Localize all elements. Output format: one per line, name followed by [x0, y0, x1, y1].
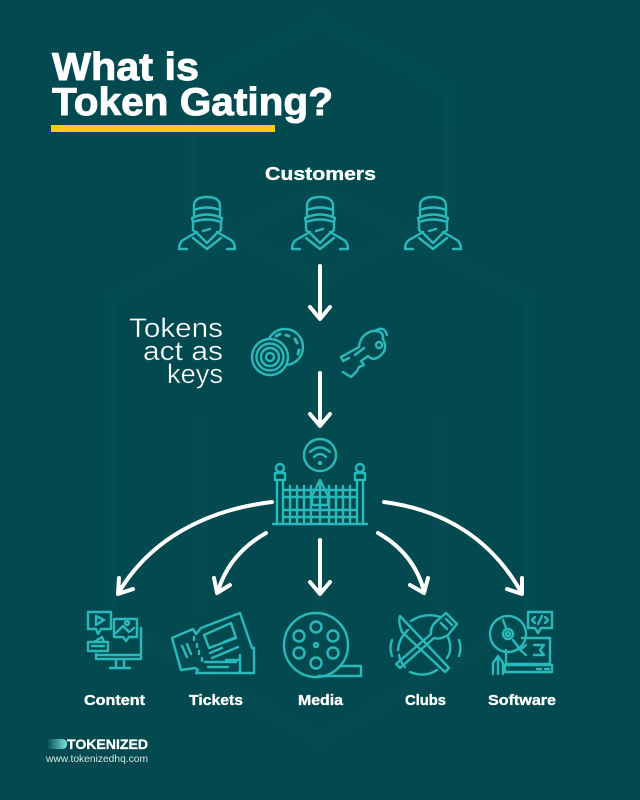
- label: content: Content: [84, 693, 145, 709]
- text: tokens act as keys: [129, 313, 223, 389]
- logo: www.tokenizedhq.com: [45, 754, 148, 765]
- arrow: gate to media: [310, 540, 330, 594]
- arrow: tokens to gate: [310, 373, 330, 426]
- icon: content monitor: [88, 612, 141, 668]
- arrow: gate to software: [384, 502, 522, 594]
- label: media: Media: [298, 693, 344, 709]
- logo: [45, 736, 148, 765]
- icon: gate: [273, 464, 367, 524]
- icon: customer centre: [292, 197, 348, 249]
- arrow: customers to tokens: [310, 266, 330, 319]
- title: Token Gating?: [52, 81, 333, 124]
- heading: customers: Customers: [265, 163, 376, 184]
- title: What is: [52, 46, 199, 89]
- icon: media reel: [284, 613, 361, 677]
- text: tokens act as keys: act as: [143, 336, 223, 366]
- label: tickets: Tickets: [189, 693, 243, 709]
- icon: tickets: [172, 613, 254, 673]
- logo: TOKENIZED: [67, 736, 148, 752]
- arrow: gate to tickets: [214, 533, 266, 593]
- icon: clubs cutlery: [390, 613, 460, 675]
- icon: software: [490, 612, 552, 674]
- text: tokens act as keys: Tokens: [129, 313, 223, 343]
- arrow: gate to content: [118, 502, 272, 594]
- icon: wifi badge: [304, 439, 336, 471]
- icon: customer left: [179, 197, 235, 249]
- text: tokens act as keys: keys: [167, 359, 223, 389]
- icon: keys: [341, 329, 387, 377]
- label: clubs: Clubs: [405, 693, 446, 709]
- icon: customer right: [405, 197, 461, 249]
- title underline: [51, 125, 275, 132]
- title: [52, 46, 333, 124]
- icon: coins: [252, 329, 303, 375]
- label: software: Software: [488, 693, 556, 709]
- arrow: gate to clubs: [378, 533, 428, 593]
